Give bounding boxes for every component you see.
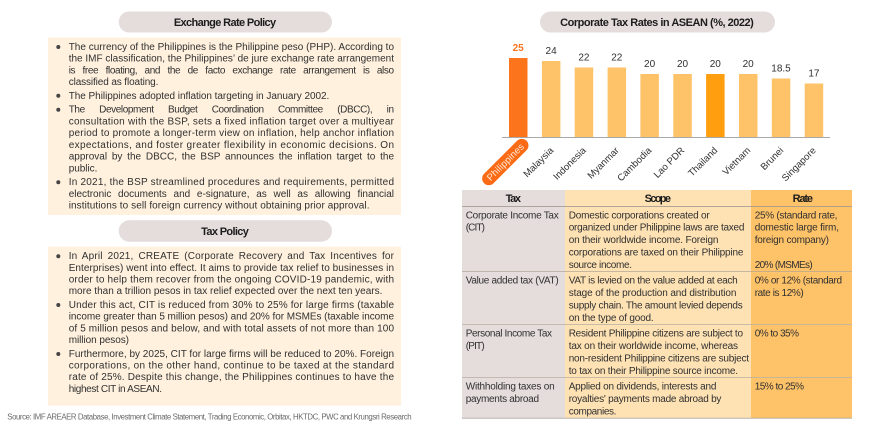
bar chart: 18.5 [771,64,791,74]
text block: exchange rate bullets: approval by the DBCC, the BSP announces the inflation target to the [69,152,394,163]
category labels: other countries [522,145,819,184]
table row: corporate income tax: source income. [569,260,632,271]
table row: personal income tax: Personal Income Tax [466,329,552,340]
bar chart: 20 [743,59,754,70]
text block: tax policy bullets: corporations, on the other hand, continue to be taxed at the standard [69,360,394,372]
text block: exchange rate bullets: public. [69,163,97,174]
table row: personal income tax [462,325,852,378]
table row: corporate income tax: on their worldwide income. Foreign [569,235,718,246]
bar chart: 20 [644,59,656,70]
heading: tax policy [119,220,332,242]
category labels: other countries: Brunei [759,145,786,173]
text block: exchange rate bullets: the IMF classification, the Philippines’ de jure exchange rate arrangement [69,54,394,65]
table row: personal income tax: tax on their worldwide income, whereas [569,341,738,352]
heading: tax policy: Tax Policy [201,226,250,238]
text block: exchange rate bullets: The Development Budget Coordination Committee (DBCC), in [69,105,394,116]
category labels: other countries: Thailand [686,145,720,179]
panel: tax policy [48,220,401,406]
heading: exchange rate policy [119,12,332,32]
table row: personal income tax: non-resident Philippine citizens are subject [569,354,749,364]
table row: corporate income tax: corporations are taxed on their Philippine [569,248,744,258]
bar chart: 22 [578,52,590,64]
table row: withholding taxes: 15% to 25% [755,382,804,393]
table row: corporate income tax: Corporate Income Tax [466,210,559,221]
table row: corporate income tax: organized under Philippine laws are taxed [569,223,744,234]
table row: corporate income tax: 25% (standard rate, [755,210,837,221]
text block: exchange rate bullets: The Philippines adopted inflation targeting in January 2002. [69,91,329,102]
table row: corporate income tax: Domestic corporations created or [569,210,710,221]
table row: personal income tax: Resident Philippine citizens are subject to [569,329,743,340]
text block: tax policy bullets [48,247,401,406]
category labels: other countries: Indonesia [551,145,589,183]
bar chart: 17 [808,68,820,80]
table row: value added tax: 0% or 12% (standard [755,276,842,287]
table row: value added tax: stage of the production and distribution [569,288,736,299]
bar chart: 20 [677,59,688,70]
text block: tax policy bullets: million pesos) [69,335,129,346]
table row: value added tax: VAT is levied on the value added at each [569,276,738,287]
category label: Philippines highlight: Philippines [485,142,527,183]
table row: withholding taxes [462,378,852,419]
table row: value added tax: Value added tax (VAT) [466,276,559,287]
text block: exchange rate bullets: The currency of the Philippines is the Philippine peso (PHP). According to [69,42,394,53]
bar chart: 22 [611,52,623,64]
text block: exchange rate bullets: consultation with the BSP, sets a fixed inflation target over a multiyear [69,116,395,127]
bar chart [502,43,830,138]
table: tax overview [462,190,852,419]
bar chart: 24 [546,46,557,57]
table row: withholding taxes: Applied on dividends, interests and [569,382,716,393]
category labels: other countries: Cambodia [615,145,655,184]
text block: tax policy bullets: rate of 25%. Despite this change, the Philippines continues to have the [69,372,394,383]
category label: Philippines highlight [479,136,531,188]
table header: Tax [506,193,522,205]
text block: exchange rate bullets: classified as floating. [69,77,158,88]
table row: corporate income tax: (CIT) [466,223,485,234]
text block: tax policy bullets: Furthermore, by 2025, CIT for large firms will be reduced to 20%. Foreign [69,349,394,360]
text block: tax policy bullets: highest CIT in ASEAN. [69,384,162,395]
table row: corporate income tax: 20% (MSMEs) [755,260,813,271]
bar chart: 25 [513,43,524,54]
table row: withholding taxes: royalties' payments made abroad by [569,394,721,405]
bar chart: 20 [710,59,721,70]
category labels: other countries: Myanmar [586,145,622,181]
text block: tax policy bullets: Enterprises) went into effect. It aims to provide tax relief to businesses in [69,263,394,274]
text block: exchange rate bullets [48,38,401,215]
text block: exchange rate bullets: period to promote a longer-term view on inflation, help anchor inflation [69,128,394,139]
text block: exchange rate bullets: electronic documents and e-signature, as well as allowing financial [69,189,394,200]
table row: value added tax: on the type of good. [569,313,654,324]
text block: exchange rate bullets: institutions to sell foreign currency without obtaining prior approval. [69,201,369,212]
text block: tax policy bullets: In April 2021, CREATE (Corporate Recovery and Tax Incentives for [69,251,395,262]
text block: tax policy bullets: order to help them recover from the ongoing COVID-19 pandemic, with [69,274,394,286]
table header [462,190,852,207]
table row: personal income tax: to tax on their Philippine source income. [569,366,738,377]
source note: Source: IMF AREAER Database, Investment Climate Statement, Trading Economic, Orbitax, HKTDC, PWC and Krungsri Research [7,412,412,421]
table row: personal income tax: (PIT) [466,341,485,352]
table row: withholding taxes: payments abroad [466,394,539,405]
text block: exchange rate bullets: expectations, and foster greater flexibility in economic decisions. On [69,140,394,151]
text block: tax policy bullets: Under this act, CIT is reduced from 30% to 25% for large firms (taxable [69,300,394,311]
table header: Scope [645,193,671,205]
heading: exchange rate policy: Exchange Rate Policy [174,17,277,29]
text block: tax policy bullets: more than a trillion pesos in tax relief expected over the next ten years. [69,286,382,297]
table row: value added tax [462,272,852,325]
panel: corporate tax rates chart [479,12,830,188]
table row: corporate income tax [462,207,852,272]
text block: exchange rate bullets: is free floating, and the de facto exchange rate arrangement is also [69,65,394,76]
category labels: other countries: Vietnam [721,145,753,178]
table row: corporate income tax: domestic large firm, [755,223,839,234]
table row: corporate income tax: foreign company) [755,235,829,246]
table header: Rate [793,193,813,205]
table row: personal income tax: 0% to 35% [755,329,799,340]
heading: corporate tax rates: Corporate Tax Rates in ASEAN (%, 2022) [560,17,754,29]
text block: tax policy bullets: income greater than 5 million pesos) and 20% for MSMEs (taxable income [69,312,394,323]
table row: value added tax: rate is 12%) [755,288,804,299]
category labels: other countries: Malaysia [522,145,557,180]
category labels: other countries: Singapore [780,145,819,184]
category labels: other countries: Lao PDR [652,145,687,181]
table row: value added tax: supply chain. The amount levied depends [569,300,743,312]
panel: exchange rate policy [48,12,401,215]
table row: withholding taxes: companies. [569,406,616,418]
table row: withholding taxes: Withholding taxes on [466,382,555,393]
text block: tax policy bullets: of 5 million pesos and below, and with total assets of not more than 100 [69,323,394,334]
text block: exchange rate bullets: In 2021, the BSP streamlined procedures and requirements, permitted [69,177,394,188]
heading: corporate tax rates [540,12,775,32]
